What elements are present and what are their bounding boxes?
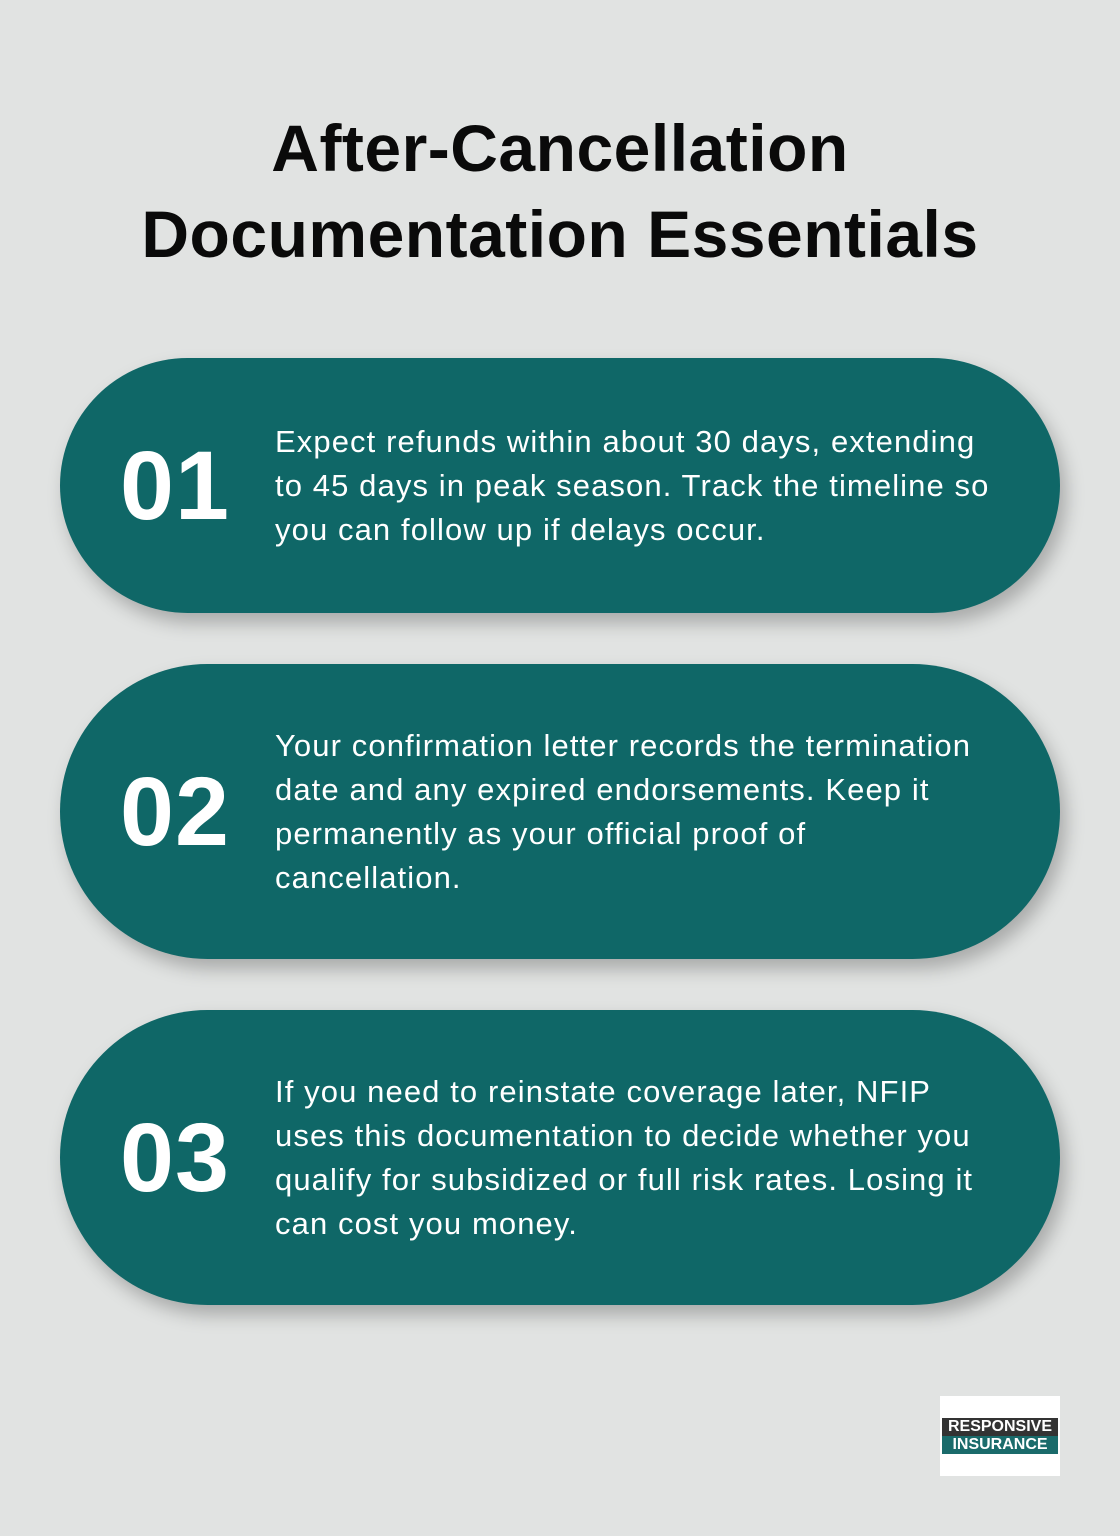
number 02: 02	[120, 756, 230, 866]
logo	[940, 1396, 1060, 1476]
title: Documentation Essentials	[141, 197, 979, 271]
title: After-Cancellation	[271, 111, 849, 185]
panel: step 03	[60, 1010, 1060, 1305]
text 01: you can follow up if delays occur.	[275, 512, 766, 546]
panel: step 01	[60, 358, 1060, 613]
text 03	[275, 1074, 973, 1240]
logo: INSURANCE	[952, 1436, 1048, 1453]
text 02: date and any expired endorsements. Keep it	[275, 772, 930, 806]
text 03: qualify for subsidized or full risk rates. Losing it	[275, 1162, 973, 1196]
logo: RESPONSIVE	[948, 1418, 1052, 1435]
text 01	[275, 424, 990, 546]
text 02: Your confirmation letter records the termination	[275, 728, 971, 762]
text 02: cancellation.	[275, 860, 462, 894]
title	[141, 111, 979, 271]
text 01: to 45 days in peak season. Track the timeline so	[275, 468, 990, 502]
text 01: Expect refunds within about 30 days, extending	[275, 424, 975, 458]
number 01: 01	[120, 430, 230, 540]
number 03: 03	[120, 1102, 230, 1212]
text 02	[275, 728, 971, 894]
text 03: can cost you money.	[275, 1206, 578, 1240]
panel: step 02	[60, 664, 1060, 959]
text 03: uses this documentation to decide whether you	[275, 1118, 971, 1152]
text 02: permanently as your official proof of	[275, 816, 806, 850]
text 03: If you need to reinstate coverage later, NFIP	[275, 1074, 931, 1108]
